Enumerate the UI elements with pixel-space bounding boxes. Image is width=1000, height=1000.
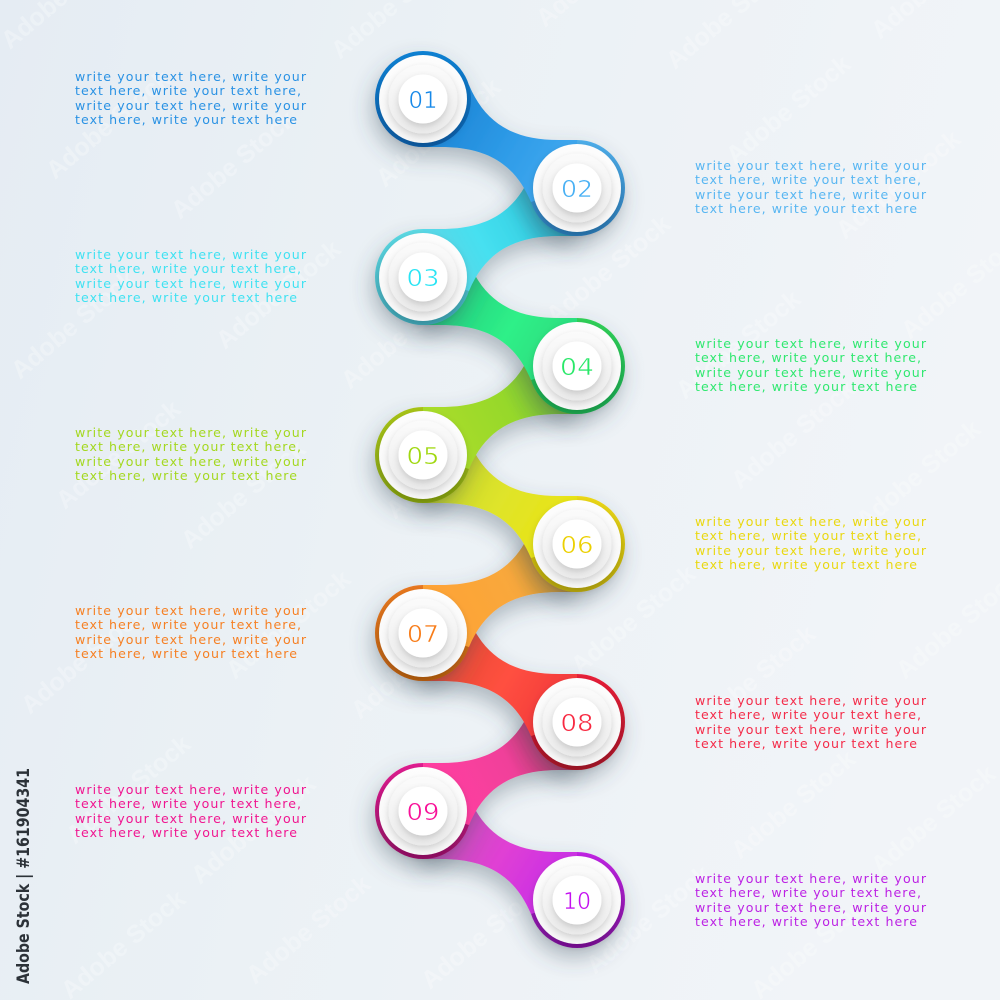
connector 06 to 07 [375,530,577,681]
text block 07: write your text here, write your [75,632,307,647]
text block 05: write your text here, write your [75,425,307,440]
watermark pattern: Adobe Stock [221,565,356,685]
node 07: 07 [407,620,439,648]
text block 10 [695,871,927,929]
text block 08 [695,693,927,751]
watermark pattern: Adobe Stock [671,285,806,405]
text block 05: text here, write your text here [75,468,297,483]
node 04 [533,322,621,410]
text block 08: write your text here, write your [695,693,927,708]
watermark pattern: Adobe Stock [346,605,481,725]
text block 01: write your text here, write your [75,98,307,113]
watermark pattern: Adobe Stock [581,860,716,980]
text block 09: write your text here, write your [75,782,307,797]
text block 03: write your text here, write your [75,247,307,262]
text block 01: text here, write your text here, [75,83,301,98]
text block 05: text here, write your text here, [75,439,301,454]
connector 05 to 06 [423,441,625,592]
watermark pattern: Adobe Stock [851,415,986,535]
node 01 [379,55,467,143]
node 07 [379,589,467,677]
watermark pattern: Adobe Stock [41,65,176,185]
text block 05 [75,425,307,483]
watermark pattern: Adobe Stock [391,735,526,855]
text block 02: text here, write your text here [695,201,917,216]
watermark pattern: Adobe Stock [541,210,676,330]
text block 02: text here, write your text here, [695,172,921,187]
watermark pattern: Adobe Stock [166,105,301,225]
text block 06: text here, write your text here [695,557,917,572]
text block 06: text here, write your text here, [695,528,921,543]
watermark pattern: Adobe Stock [371,73,506,193]
watermark pattern: Adobe Stock [336,275,471,395]
text block 08: text here, write your text here [695,736,917,751]
node 03: 03 [406,264,440,292]
node 05: 05 [406,442,440,470]
watermark pattern: Adobe Stock [866,760,1000,880]
node 08: 08 [560,709,594,737]
connector 01 to 02 [375,51,625,236]
connector 09 to 10 [423,797,625,948]
watermark pattern: Adobe Stock [726,745,861,865]
text block 06: write your text here, write your [695,514,927,529]
stock id label: Adobe Stock | #161904341 [14,768,34,984]
node 09 [379,767,467,855]
text block 04: write your text here, write your [695,336,927,351]
text block 07: write your text here, write your [75,603,307,618]
text block 09: text here, write your text here [75,825,297,840]
text block 03: write your text here, write your [75,276,307,291]
watermark pattern: Adobe Stock [186,770,321,890]
node 06 [533,500,621,588]
text block 07: text here, write your text here, [75,617,301,632]
node 04: 04 [560,353,594,381]
watermark pattern: Adobe Stock [211,235,346,355]
connector 02 to 03 [375,174,577,325]
node 02: 02 [561,175,593,203]
text block 09: write your text here, write your [75,811,307,826]
text block 01: text here, write your text here [75,112,297,127]
text block 03: text here, write your text here, [75,261,301,276]
watermark pattern: Adobe Stock [831,125,966,245]
watermark pattern: Adobe Stock [686,620,821,740]
watermark pattern: Adobe Stock [241,870,376,990]
node 02 [533,144,621,232]
text block 05: write your text here, write your [75,454,307,469]
text block 06: write your text here, write your [695,543,927,558]
text block 08: text here, write your text here, [695,707,921,722]
text block 03: text here, write your text here [75,290,297,305]
node 01: 01 [408,86,438,114]
watermark pattern: Adobe Stock [726,375,861,495]
watermark pattern: Adobe Stock [176,435,311,555]
text block 02: write your text here, write your [695,158,927,173]
text block 10: write your text here, write your [695,871,927,886]
text block 10: text here, write your text here, [695,885,921,900]
text block 06 [695,514,927,572]
text block 04: text here, write your text here, [695,350,921,365]
text block 02: write your text here, write your [695,187,927,202]
text block 04: write your text here, write your [695,365,927,380]
watermark pattern: Adobe Stock [721,50,856,170]
text block 03 [75,247,307,305]
watermark pattern: Adobe Stock [16,600,151,720]
text block 08: write your text here, write your [695,722,927,737]
text block 02 [695,158,927,216]
connector 08 to 09 [375,708,577,859]
watermark pattern: Adobe Stock [566,560,701,680]
node 10 [533,856,621,944]
node 05 [379,411,467,499]
text block 09: text here, write your text here, [75,796,301,811]
text block 10: text here, write your text here [695,914,917,929]
text block 07 [75,603,307,661]
watermark pattern: Adobe Stock [381,405,516,525]
node 10: 10 [563,887,591,915]
node 08 [533,678,621,766]
text block 04: text here, write your text here [695,379,917,394]
connector 04 to 05 [375,352,577,503]
node 06: 06 [560,531,594,559]
connector 07 to 08 [423,619,625,770]
text block 04 [695,336,927,394]
text block 10: write your text here, write your [695,900,927,915]
connector 03 to 04 [423,263,625,414]
text block 01 [75,69,307,127]
watermark pattern: Adobe Stock [51,395,186,515]
text block 07: text here, write your text here [75,646,297,661]
node 03 [379,233,467,321]
watermark pattern: Adobe Stock [416,875,551,995]
watermark pattern: Adobe Stock [6,265,141,385]
node 09: 09 [406,798,440,826]
watermark pattern: Adobe Stock [61,730,196,850]
text block 09 [75,782,307,840]
text block 01: write your text here, write your [75,69,307,84]
